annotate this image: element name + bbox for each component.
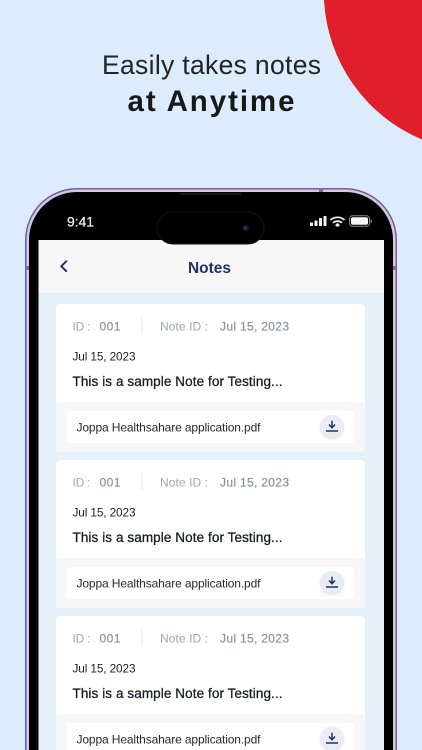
note card 2: Jul 15, 2023 — [72, 506, 136, 520]
note card 3: Joppa Healthsahare application.pdf — [76, 732, 261, 746]
frame bands — [25, 188, 397, 270]
title: Easily takes notes — [102, 50, 321, 80]
note card 2: ID : — [72, 476, 90, 490]
header bar — [38, 240, 384, 294]
title: at Anytime — [128, 85, 294, 118]
dynamic island — [157, 212, 264, 244]
phone frame — [25, 188, 397, 750]
note card 1: Note ID : — [160, 320, 208, 334]
back arrow — [61, 261, 67, 272]
note card 2: This is a sample Note for Testing... — [72, 530, 282, 545]
note card 3: Note ID : — [160, 632, 208, 646]
note card 1: Jul 15, 2023 — [220, 320, 289, 334]
note card 1 — [56, 304, 365, 452]
phone — [25, 188, 397, 750]
note card 1: Joppa Healthsahare application.pdf — [76, 420, 261, 434]
screen — [38, 240, 384, 750]
note card 3: Jul 15, 2023 — [72, 662, 136, 676]
header title: Notes — [188, 260, 231, 277]
note card 1: Jul 15, 2023 — [72, 350, 136, 364]
note card 1: ID : — [72, 320, 90, 334]
note card 2: 001 — [100, 476, 121, 490]
note card 2: Jul 15, 2023 — [220, 476, 289, 490]
note card 3: This is a sample Note for Testing... — [72, 686, 282, 701]
note card 3 — [56, 616, 365, 750]
note card 2: Joppa Healthsahare application.pdf — [76, 576, 261, 590]
note card 1: 001 — [100, 320, 121, 334]
speaker line — [180, 194, 241, 195]
note card 3: Jul 15, 2023 — [220, 632, 289, 646]
note card 3: 001 — [100, 632, 121, 646]
status icons — [310, 216, 372, 227]
note card 2: Note ID : — [160, 476, 208, 490]
status time: 9:41 — [67, 214, 94, 230]
note card 2 — [56, 460, 365, 608]
red circle — [324, 0, 422, 140]
note card 1: This is a sample Note for Testing... — [72, 374, 282, 389]
note card 3: ID : — [72, 632, 90, 646]
title — [102, 50, 321, 118]
